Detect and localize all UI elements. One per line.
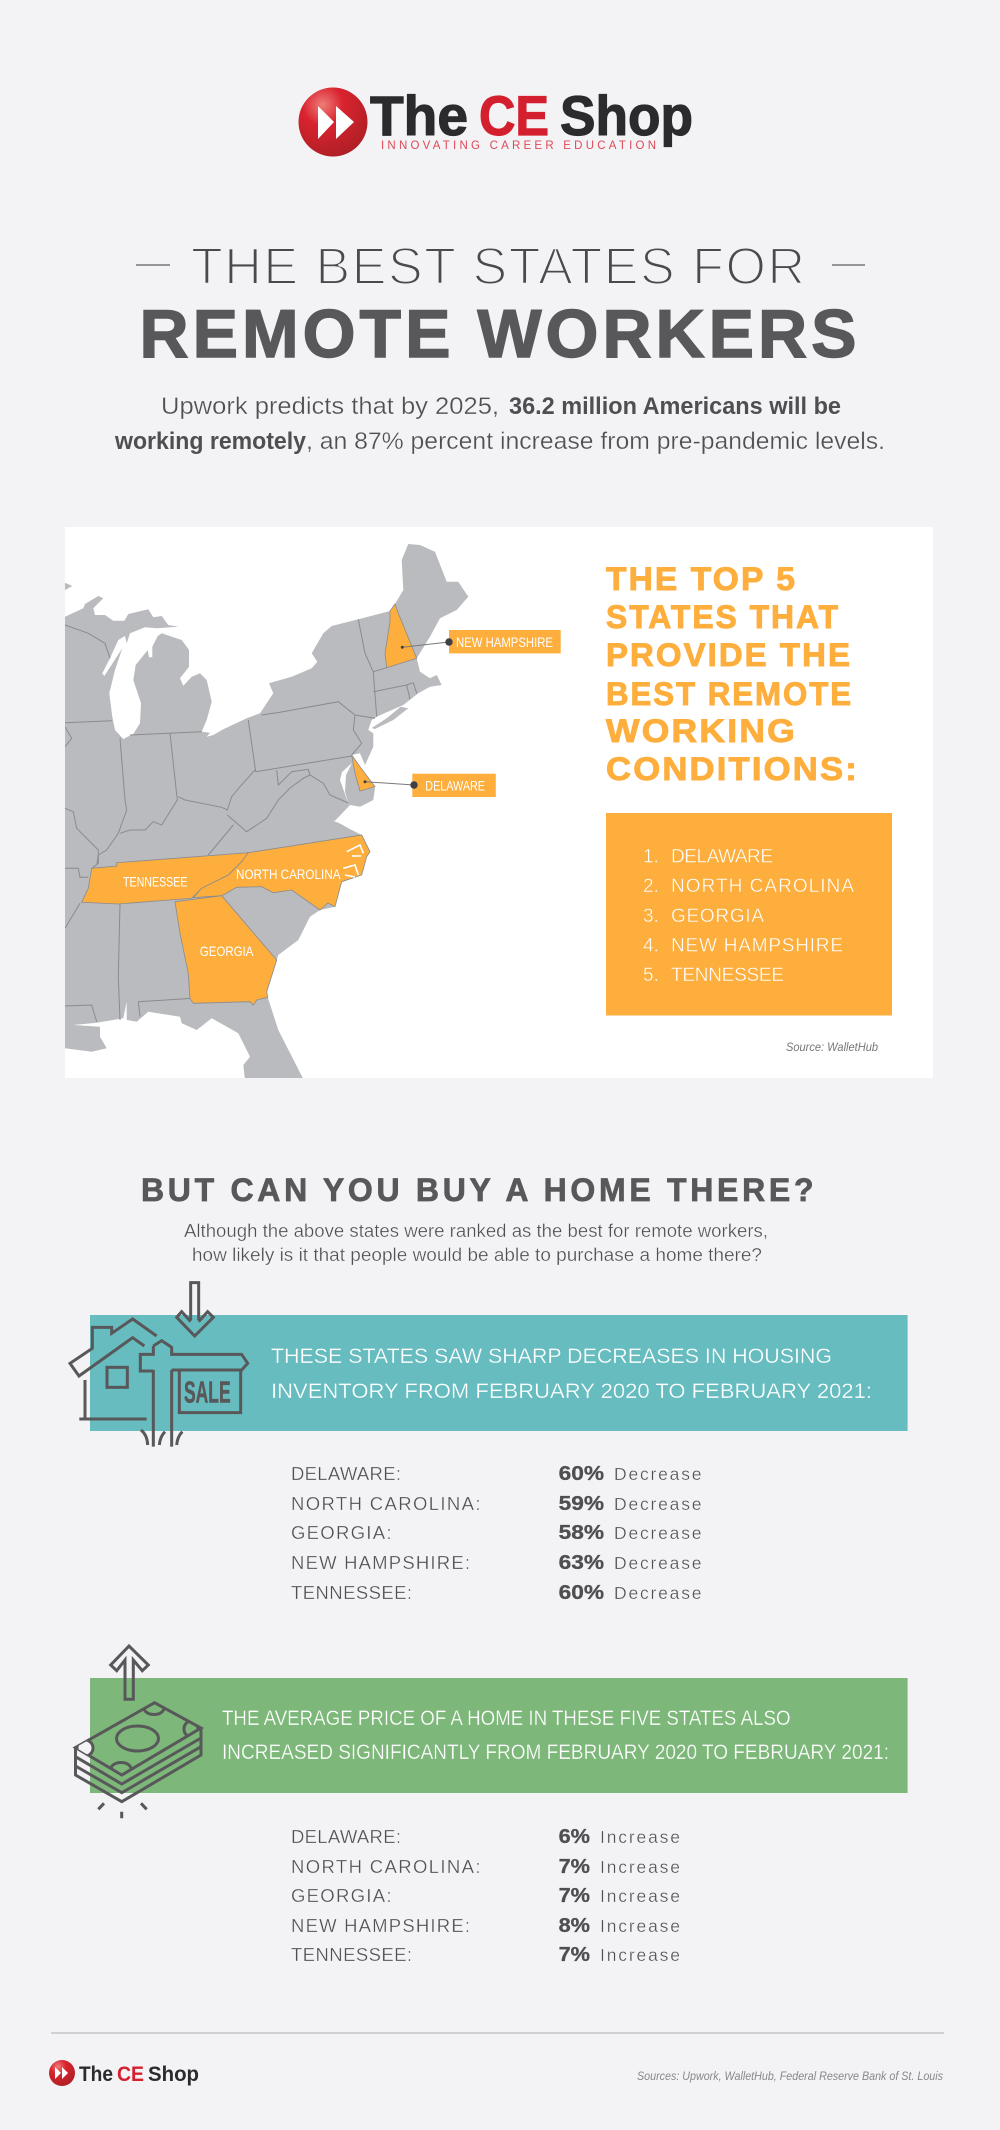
table: price increases: Increase — [600, 1945, 680, 1965]
table: price increases: TENNESSEE: — [291, 1944, 412, 1965]
table: inventory decreases: 60% — [559, 1463, 604, 1485]
table: price increases: NORTH CAROLINA: — [291, 1856, 480, 1877]
ranked list box: 1. — [643, 846, 659, 867]
heading: top 5 states: PROVIDE THE — [606, 637, 852, 673]
footer logo: Shop — [148, 2063, 199, 2086]
section intro text: Although the above states were ranked as the best for remote workers, — [184, 1221, 768, 1241]
table: inventory decreases — [291, 1463, 702, 1604]
title: THE BEST STATES FOR — [191, 238, 805, 296]
footer sources: Sources: Upwork, WalletHub, Federal Reserve Bank of St. Louis — [637, 2069, 943, 2083]
table: price increases: Increase — [600, 1916, 680, 1936]
table: inventory decreases: Decrease — [614, 1523, 702, 1543]
ranked list box: TENNESSEE — [671, 965, 784, 986]
label: Georgia: GEORGIA — [200, 943, 254, 959]
logo: The CE Shop: The — [370, 84, 468, 147]
table: inventory decreases: 58% — [559, 1522, 604, 1544]
table: inventory decreases: 63% — [559, 1552, 604, 1574]
map of eastern US — [65, 544, 468, 1080]
icon: house with sale sign and down arrow — [70, 1283, 248, 1447]
icon: house with sale sign and down arrow: SALE — [184, 1376, 231, 1410]
table: inventory decreases: TENNESSEE: — [291, 1582, 412, 1603]
table: inventory decreases: GEORGIA: — [291, 1522, 392, 1543]
table: price increases: 7% — [559, 1856, 590, 1878]
footer logo: CE — [117, 2063, 144, 2086]
callout: Delaware — [364, 774, 496, 797]
heading: top 5 states: WORKING — [606, 713, 797, 749]
label: Tennessee: TENNESSEE — [123, 873, 188, 889]
section intro text — [184, 1221, 768, 1265]
callout: New Hampshire — [401, 630, 561, 653]
source note: Source: WalletHub — [786, 1040, 878, 1054]
logo: The CE Shop — [298, 84, 693, 156]
intro text: working remotely — [114, 428, 307, 455]
table: inventory decreases: 60% — [559, 1582, 604, 1604]
heading: can you buy a home: BUT CAN YOU BUY A HOME THERE? — [141, 1172, 814, 1208]
ranked list box: NEW HAMPSHIRE — [671, 936, 843, 956]
heading: top 5 states: CONDITIONS: — [606, 751, 859, 787]
table: price increases: NEW HAMPSHIRE: — [291, 1915, 470, 1936]
table: price increases: Increase — [600, 1886, 680, 1906]
label: North Carolina: NORTH CAROLINA — [236, 866, 341, 882]
intro text: 36.2 million Americans will be — [509, 393, 841, 420]
intro text: Upwork predicts that by 2025, — [161, 393, 499, 420]
ranked list box: DELAWARE — [671, 846, 773, 867]
table: inventory decreases: DELAWARE: — [291, 1463, 401, 1484]
table: inventory decreases: NEW HAMPSHIRE: — [291, 1552, 470, 1573]
ranked list box: 5. — [643, 965, 659, 986]
heading: top 5 states: THE TOP 5 — [606, 561, 797, 597]
ranked list box — [606, 813, 892, 1016]
logo: The CE Shop: CE — [479, 84, 549, 147]
callout: Delaware: DELAWARE — [425, 778, 485, 793]
table: price increases: 6% — [559, 1826, 590, 1848]
table: price increases: 7% — [559, 1944, 590, 1966]
table: inventory decreases: Decrease — [614, 1494, 702, 1514]
table: inventory decreases: 59% — [559, 1493, 604, 1515]
ranked list box: 2. — [643, 876, 659, 897]
table: price increases: GEORGIA: — [291, 1885, 392, 1906]
logo: The CE Shop: INNOVATING CAREER EDUCATION — [381, 140, 656, 152]
footer logo: The — [79, 2063, 113, 2086]
table: price increases: DELAWARE: — [291, 1826, 401, 1847]
ranked list box: 4. — [643, 936, 659, 956]
banner: housing inventory: THESE STATES SAW SHARP DECREASES IN HOUSING — [271, 1345, 832, 1368]
table: inventory decreases: NORTH CAROLINA: — [291, 1493, 480, 1514]
callout: New Hampshire: NEW HAMPSHIRE — [456, 635, 553, 650]
table: price increases: Increase — [600, 1857, 680, 1877]
logo: The CE Shop: Shop — [560, 84, 693, 147]
section intro text: how likely is it that people would be able to purchase a home there? — [192, 1245, 762, 1265]
table: inventory decreases: Decrease — [614, 1583, 702, 1603]
banner: home prices — [90, 1678, 908, 1793]
title — [136, 238, 865, 372]
intro text: , an 87% percent increase from pre-pandemic levels. — [306, 428, 885, 455]
ranked list box: NORTH CAROLINA — [671, 876, 854, 897]
icon: stack of money with up arrow — [76, 1646, 201, 1818]
heading: top 5 states: BEST REMOTE — [606, 676, 853, 712]
heading: top 5 states: STATES THAT — [606, 599, 840, 635]
table: inventory decreases: Decrease — [614, 1553, 702, 1573]
table: inventory decreases: Decrease — [614, 1464, 702, 1484]
table: price increases: 8% — [559, 1915, 590, 1937]
ranked list box: GEORGIA — [671, 906, 764, 927]
heading: top 5 states — [606, 561, 859, 787]
ranked list box: 3. — [643, 906, 659, 927]
panel: top states — [65, 527, 933, 1080]
table: price increases — [291, 1826, 680, 1966]
intro text — [114, 393, 885, 455]
banner: home prices: INCREASED SIGNIFICANTLY FROM FEBRUARY 2020 TO FEBRUARY 2021: — [222, 1741, 889, 1764]
banner: housing inventory: INVENTORY FROM FEBRUARY 2020 TO FEBRUARY 2021: — [271, 1380, 872, 1403]
table: price increases: 7% — [559, 1885, 590, 1907]
banner: housing inventory — [90, 1315, 908, 1431]
title: REMOTE WORKERS — [140, 296, 856, 372]
banner: home prices: THE AVERAGE PRICE OF A HOME IN THESE FIVE STATES ALSO — [222, 1707, 790, 1730]
table: price increases: Increase — [600, 1827, 680, 1847]
footer logo — [49, 2060, 199, 2086]
